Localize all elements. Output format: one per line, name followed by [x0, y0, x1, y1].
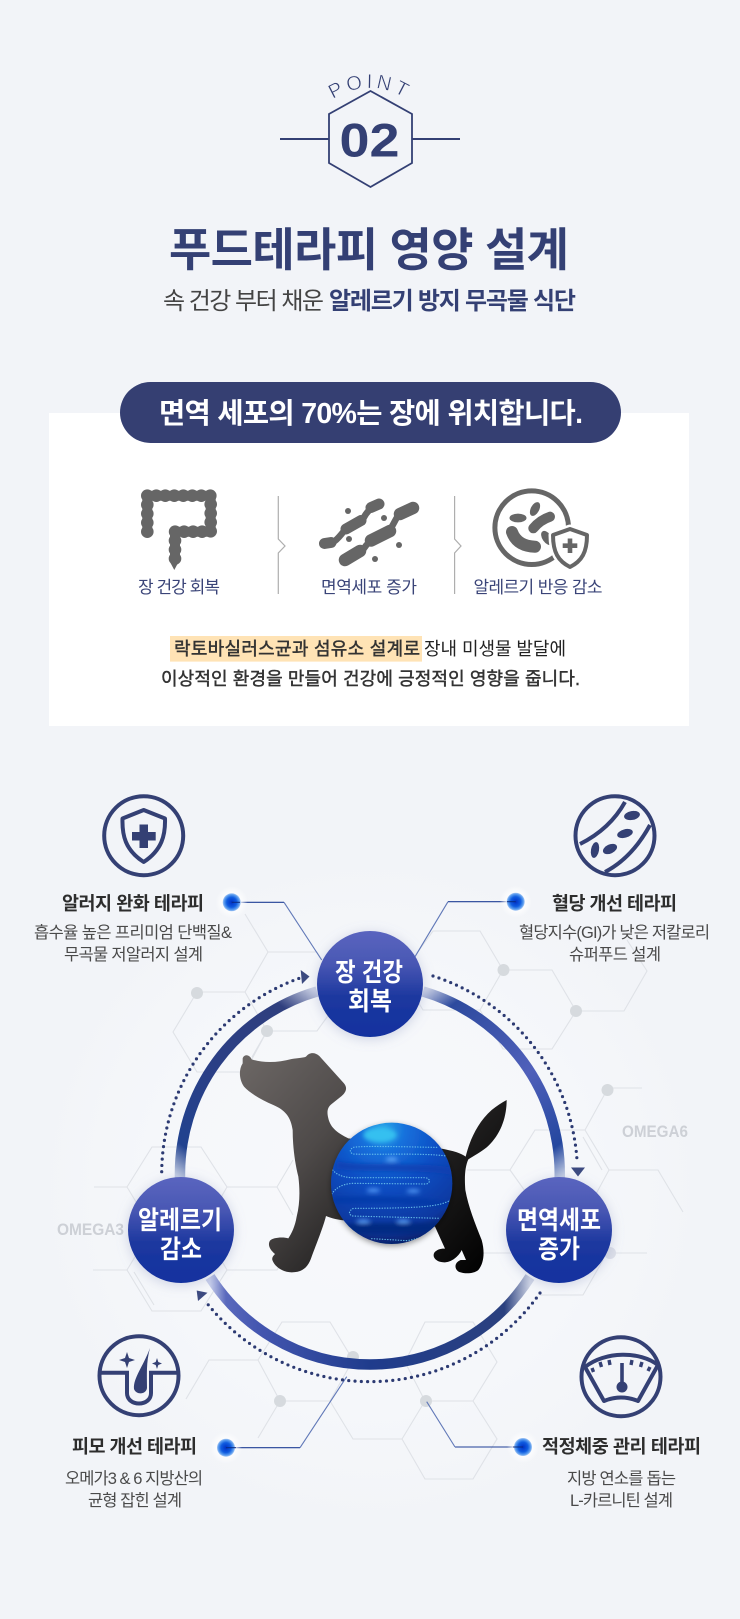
ring arc: bottom	[210, 1277, 530, 1365]
therapy: allergy relief: 무곡물 저알러지 설계	[64, 945, 203, 964]
label: 면역세포 증가	[321, 578, 417, 597]
headline pill	[120, 382, 621, 443]
pointer dot	[500, 886, 532, 918]
main title: 푸드테라피 영양 설계	[169, 224, 569, 276]
POINT arc label: POINT	[328, 74, 410, 98]
ring arc: top right	[423, 992, 560, 1178]
icon: hair follicle	[100, 1336, 178, 1415]
badge number: 02	[340, 114, 400, 166]
highlighted description: 이상적인 환경을 만들어 건강에 긍정적인 영향을 줍니다.	[161, 669, 580, 689]
node: immune cell increase: 증가	[538, 1236, 580, 1264]
heading: 피모 개선 테라피	[72, 1436, 197, 1457]
hexagon nodes	[191, 964, 616, 1407]
icon: bacteria	[324, 504, 413, 562]
icon: shield	[104, 796, 183, 875]
dog body	[240, 1053, 507, 1273]
therapy: allergy relief	[34, 796, 248, 964]
dotted cycle arrows	[162, 976, 577, 1382]
highlighted description: 장내 미생물 발달에	[424, 639, 566, 659]
description: 혈당지수(GI)가 낮은 저칼로리	[519, 923, 710, 942]
description: 흡수율 높은 프리미엄 단백질&	[34, 923, 232, 942]
step: gut health	[138, 496, 220, 597]
therapy: blood sugar: 슈퍼푸드 설계	[569, 945, 661, 964]
heading: 알러지 완화 테라피	[62, 893, 204, 914]
arrowheads	[197, 970, 585, 1301]
ring arc: top left	[180, 992, 317, 1178]
section header: point badge	[280, 74, 460, 188]
connector: blood sugar therapy	[415, 902, 516, 957]
divider chevron	[278, 496, 285, 594]
node: immune cell increase	[506, 1177, 612, 1283]
badge hexagon	[329, 91, 412, 187]
step: immune cells	[321, 504, 417, 597]
connector: weight therapy	[427, 1402, 523, 1447]
badge side lines	[280, 138, 460, 140]
node: gut health: 회복	[348, 988, 392, 1016]
therapy: coat care	[65, 1336, 242, 1510]
step: allergy reduction	[474, 491, 602, 597]
cycle ring	[180, 992, 560, 1365]
hexagon network background	[93, 914, 683, 1479]
subtitle: 속 건강 부터 채운	[163, 288, 324, 315]
heading: 적정체중 관리 테라피	[542, 1436, 701, 1457]
icon: grains band	[576, 796, 654, 875]
therapy: weight management: L-카르니틴 설계	[570, 1491, 673, 1510]
headline pill: 면역 세포의 70%는 장에 위치합니다.	[159, 398, 583, 430]
OMEGA labels: OMEGA3	[57, 1221, 124, 1239]
dog silhouette with gut ball	[240, 1053, 507, 1273]
node: allergy reduction	[128, 1177, 234, 1283]
therapy: coat care: 균형 잡힌 설계	[88, 1491, 182, 1510]
divider chevron	[455, 496, 461, 594]
node: allergy reduction: 감소	[160, 1236, 202, 1264]
background glow	[30, 850, 710, 1530]
description: 오메가3 & 6 지방산의	[65, 1469, 203, 1488]
therapy: blood sugar	[500, 796, 710, 964]
label: 장 건강 회복	[138, 578, 220, 597]
subtitle	[163, 288, 576, 315]
pointer dot	[216, 886, 248, 918]
description: 지방 연소를 돕는	[567, 1469, 676, 1488]
connector: coat therapy	[226, 1377, 347, 1448]
connector: allergy therapy	[232, 902, 322, 960]
icon: scale gauge	[582, 1337, 660, 1416]
node: immune cell increase: 면역세포	[517, 1207, 601, 1235]
node: allergy reduction: 알레르기	[138, 1207, 222, 1235]
therapy: weight management	[507, 1337, 701, 1510]
highlighted description	[161, 636, 580, 689]
node: gut health	[317, 931, 423, 1037]
highlighted description: 락토바실러스균과 섬유소 설계로	[174, 639, 420, 659]
OMEGA labels	[57, 1123, 688, 1239]
heading: 혈당 개선 테라피	[552, 893, 677, 914]
icon: intestine	[147, 496, 211, 570]
subtitle: 알레르기 방지 무곡물 식단	[329, 288, 576, 315]
OMEGA labels: OMEGA6	[622, 1123, 688, 1141]
icon: bacteria with shield	[495, 491, 587, 567]
white info panel	[49, 413, 689, 726]
pointer dot	[210, 1432, 242, 1464]
node: gut health: 장 건강	[335, 959, 403, 987]
label: 알레르기 반응 감소	[474, 578, 602, 597]
gut ball	[331, 1123, 453, 1244]
pointer dot	[507, 1431, 539, 1463]
